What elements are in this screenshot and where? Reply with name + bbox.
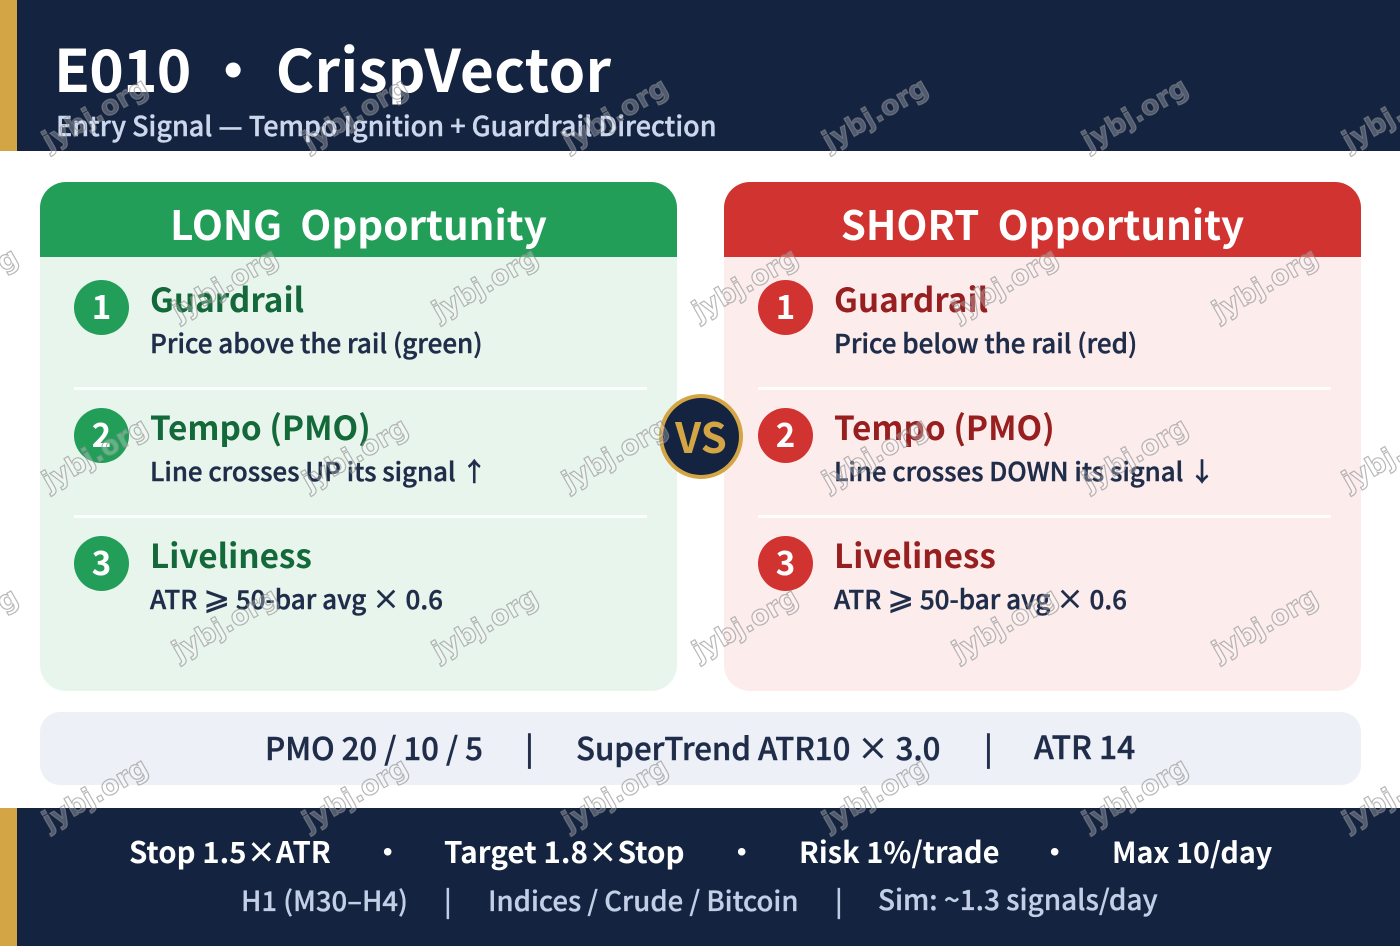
footer row 1: • <box>727 830 756 872</box>
short heading: SHORT Opportunity <box>841 193 1244 252</box>
long badge 1 <box>74 280 129 335</box>
footer row 1: Risk 1%/trade <box>799 830 1000 872</box>
footer row 1: Target 1.8×Stop <box>444 829 685 872</box>
footer row 2: Indices / Crude / Bitcoin <box>488 879 799 919</box>
VS badge: VS <box>675 405 727 466</box>
parameter bar: | <box>984 724 993 769</box>
watermarks: jybj.org <box>556 72 674 158</box>
footer row 1 <box>129 829 1272 872</box>
short item 2 text: Line crosses DOWN its signal ↓ <box>834 452 1215 489</box>
watermarks: jybj.org <box>426 242 544 328</box>
short item 1 title: Guardrail <box>834 273 988 322</box>
watermarks: jybj.org <box>816 412 934 498</box>
long item 3 text: ATR ⩾ 50-bar avg × 0.6 <box>150 573 443 619</box>
panel: short <box>724 182 1361 691</box>
long item 1 title: Guardrail <box>150 273 304 322</box>
header band <box>0 0 1400 151</box>
short divider <box>758 387 1331 390</box>
footer row 2: H1 (M30–H4) <box>241 879 408 919</box>
panel: long <box>40 182 677 691</box>
VS badge <box>659 394 743 479</box>
watermarks: jybj.org <box>816 72 934 158</box>
watermarks: jybj.org <box>1076 412 1194 498</box>
parameter bar: SuperTrend ATR10 × 3.0 <box>576 724 940 769</box>
short badge 1 <box>758 280 813 335</box>
watermarks: jybj.org <box>556 752 674 838</box>
watermarks: jybj.org <box>1206 582 1324 668</box>
short badge 2: 2 <box>776 409 795 457</box>
subtitle: Entry Signal — Tempo Ignition + Guardrail Direction <box>56 105 717 144</box>
footer row 2 <box>241 879 1158 920</box>
watermarks: jybj.org <box>426 582 544 668</box>
watermarks: jybj.org <box>686 582 804 668</box>
accent bar <box>0 808 17 946</box>
long divider <box>74 387 647 390</box>
watermarks: jybj.org <box>1076 72 1194 158</box>
footer row 1: Stop 1.5×ATR <box>129 830 331 872</box>
parameter bar: ATR 14 <box>1034 723 1135 769</box>
watermarks: jybj.org <box>1206 242 1324 328</box>
long badge 2: 2 <box>92 409 111 457</box>
long badge 3: 3 <box>92 537 111 585</box>
long item 2 text: Line crosses UP its signal ↑ <box>150 452 487 489</box>
short badge 2 <box>758 408 813 463</box>
watermarks: jybj.org <box>686 242 804 328</box>
watermarks: jybj.org <box>36 72 154 158</box>
watermarks: jybj.org <box>36 752 154 838</box>
footer band <box>0 808 1400 946</box>
footer row 2: | <box>835 879 843 919</box>
watermarks: jybj.org <box>36 412 154 498</box>
accent bar <box>0 0 17 151</box>
long item 1 text: Price above the rail (green) <box>150 324 483 361</box>
short item 2 title: Tempo (PMO) <box>834 401 1055 450</box>
short badge 3: 3 <box>776 537 795 585</box>
watermarks: jybj.org <box>816 752 934 838</box>
watermarks: jybj.org <box>946 582 1064 668</box>
short item 3 text: ATR ⩾ 50-bar avg × 0.6 <box>834 573 1127 619</box>
footer row 1: • <box>1040 830 1069 872</box>
short item 1 text: Price below the rail (red) <box>834 324 1137 361</box>
watermarks: jybj.org <box>166 582 284 668</box>
short badge 1: 1 <box>776 281 795 329</box>
long item 2 title: Tempo (PMO) <box>150 401 371 450</box>
watermarks: jybj.org <box>556 412 674 498</box>
footer row 2: | <box>444 879 452 919</box>
short badge 3 <box>758 536 813 591</box>
long badge 2 <box>74 408 129 463</box>
watermarks: jybj.org <box>946 242 1064 328</box>
long heading <box>40 182 677 257</box>
watermarks: jybj.org <box>296 412 414 498</box>
watermarks: jybj.org <box>166 242 284 328</box>
watermarks: jybj.org <box>296 72 414 158</box>
short heading <box>724 182 1361 257</box>
footer row 1: Max 10/day <box>1112 831 1272 872</box>
long badge 1: 1 <box>92 281 111 329</box>
footer row 1: • <box>373 830 402 872</box>
title: E010 • CrispVector <box>54 24 611 109</box>
footer row 2: Sim: ~1.3 signals/day <box>878 879 1158 919</box>
watermarks: jybj.org <box>296 752 414 838</box>
short item 3 title: Liveliness <box>834 529 996 578</box>
long badge 3 <box>74 536 129 591</box>
watermarks: jybj.org <box>1076 752 1194 838</box>
parameter bar <box>40 712 1361 785</box>
long heading: LONG Opportunity <box>170 193 547 252</box>
parameter bar: PMO 20 / 10 / 5 <box>265 724 483 769</box>
parameter bar: | <box>525 724 534 769</box>
long item 3 title: Liveliness <box>150 529 312 578</box>
